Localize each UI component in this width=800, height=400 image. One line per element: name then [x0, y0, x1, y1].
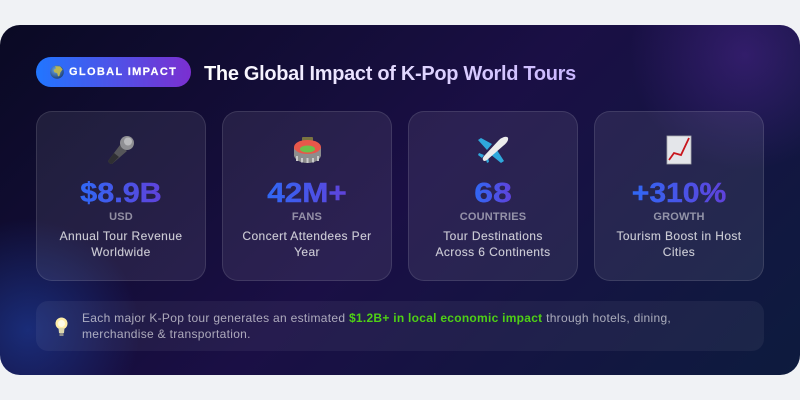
- stat value: $8.9B: [80, 177, 162, 208]
- description: Tour Destinations: [443, 229, 543, 243]
- stat unit: GROWTH: [653, 211, 705, 223]
- description: Across 6 Continents: [436, 245, 550, 259]
- description: Cities: [663, 245, 695, 259]
- panel: destinations card: [408, 111, 578, 281]
- description: Worldwide: [91, 245, 151, 259]
- icon: microphone: [108, 136, 134, 164]
- description: [242, 229, 372, 259]
- icon: stadium: [294, 137, 321, 163]
- description: Annual Tour Revenue: [60, 229, 182, 243]
- panel: tourism card: [594, 111, 764, 281]
- description: Year: [294, 245, 320, 259]
- panel: tour revenue card: [36, 111, 206, 281]
- stat unit: COUNTRIES: [460, 211, 526, 223]
- note text: [82, 311, 671, 340]
- note text: merchandise & transportation.: [82, 326, 251, 340]
- stat unit: USD: [109, 211, 133, 223]
- badge: global impact: GLOBAL IMPACT: [69, 66, 177, 78]
- panel: attendees card: [222, 111, 392, 281]
- stat unit: FANS: [292, 211, 322, 223]
- icon: light bulb: [56, 318, 68, 336]
- icon: globe: [50, 65, 64, 79]
- description: Concert Attendees Per: [242, 229, 372, 243]
- stat value: 68: [474, 177, 512, 208]
- icon: chart increasing: [666, 136, 692, 164]
- note text: Each major K-Pop tour generates an estimated $1.2B+ in local economic impact through hotels, dining,: [82, 311, 671, 325]
- stat value: 42M+: [267, 177, 347, 208]
- description: [616, 229, 742, 259]
- icon: airplane: [478, 136, 508, 163]
- description: [436, 229, 550, 259]
- callout: local economic impact: [36, 301, 764, 351]
- badge: global impact: [36, 57, 191, 87]
- title: The Global Impact of K-Pop World Tours: [204, 63, 576, 85]
- stat value: +310%: [632, 177, 726, 208]
- description: [60, 229, 182, 259]
- description: Tourism Boost in Host: [616, 229, 742, 243]
